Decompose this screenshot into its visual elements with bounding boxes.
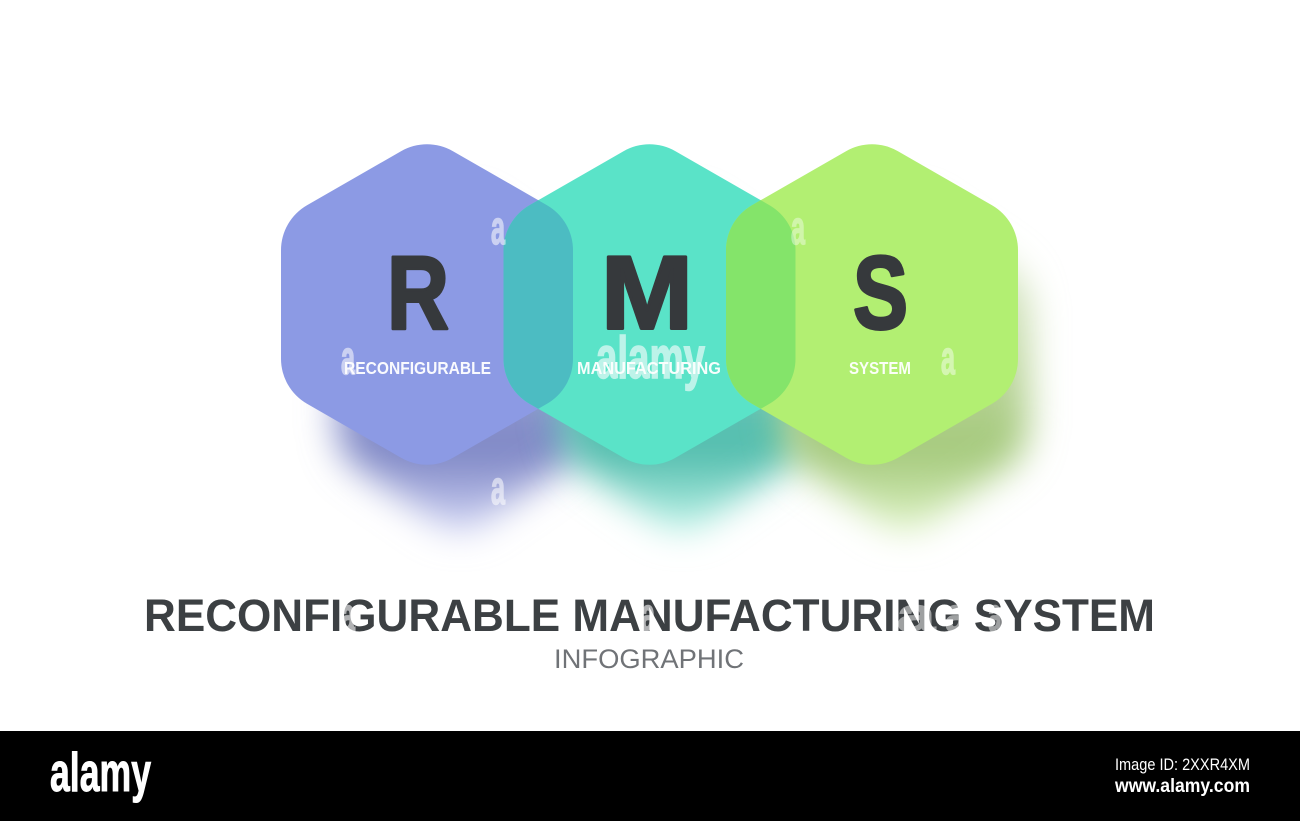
watermark: a bbox=[341, 331, 355, 384]
overlap: M and S bbox=[726, 200, 796, 409]
shadow: R hexagon bbox=[336, 204, 584, 530]
shadow: S hexagon bbox=[781, 204, 1029, 530]
footer bar bbox=[0, 731, 1300, 821]
watermark: a bbox=[941, 331, 955, 384]
hexagon: R bbox=[281, 144, 573, 465]
website: www.alamy.com bbox=[1114, 776, 1250, 797]
watermark: a bbox=[897, 588, 936, 641]
hexagon: S bbox=[726, 144, 1018, 465]
watermark: a bbox=[641, 588, 655, 641]
shadow: M hexagon bbox=[558, 204, 806, 530]
subtitle: INFOGRAPHIC bbox=[554, 644, 744, 674]
letter S: S bbox=[853, 236, 908, 352]
watermark: a bbox=[341, 588, 355, 641]
watermark: a bbox=[791, 201, 805, 254]
watermark: a bbox=[945, 588, 968, 641]
watermark: a bbox=[491, 201, 505, 254]
letter M: M bbox=[601, 236, 693, 352]
watermark: a bbox=[988, 588, 1002, 641]
letter R: R bbox=[387, 236, 449, 352]
watermark: alamy bbox=[596, 325, 705, 391]
label: System: SYSTEM bbox=[849, 358, 911, 378]
watermark bbox=[341, 201, 1002, 641]
label: Reconfigurable: RECONFIGURABLE bbox=[344, 358, 491, 378]
overlap: R and M bbox=[504, 200, 573, 409]
label: Manufacturing: MANUFACTURING bbox=[577, 358, 721, 378]
logo: alamy: alamy bbox=[50, 741, 151, 803]
watermark: a bbox=[491, 461, 505, 514]
title: RECONFIGURABLE MANUFACTURING SYSTEM bbox=[144, 590, 1155, 641]
image id: Image ID: 2XXR4XM bbox=[1115, 755, 1250, 774]
hexagon: M bbox=[504, 144, 796, 465]
